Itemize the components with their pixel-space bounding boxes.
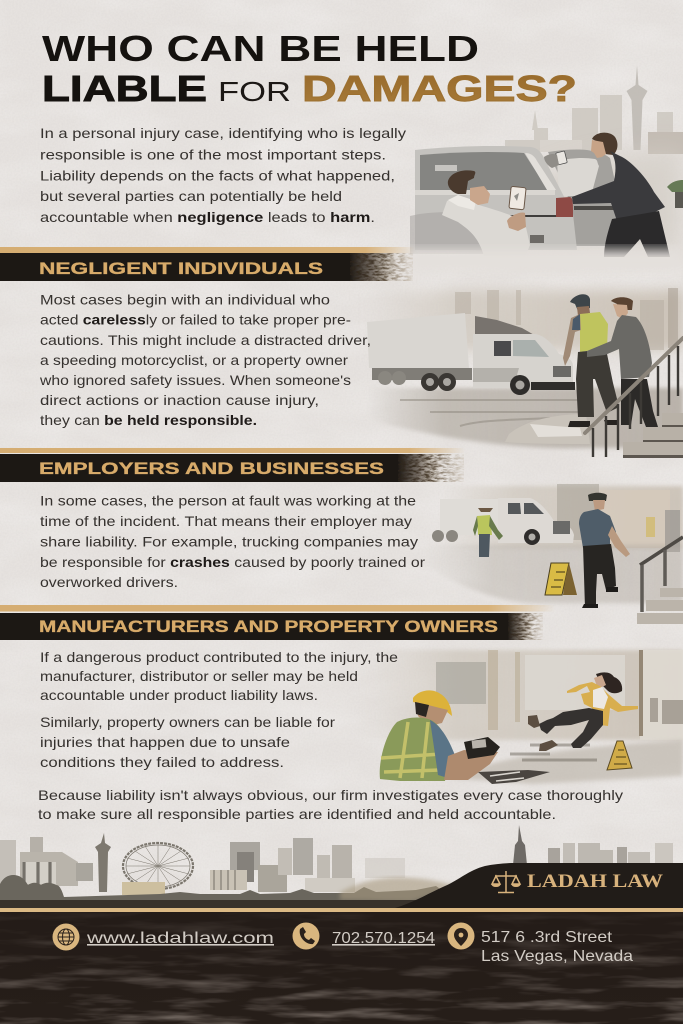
police officer bbox=[579, 493, 630, 608]
wet floor bbox=[450, 740, 683, 784]
scene: truck, worker and officer bbox=[425, 484, 683, 624]
title line 1: WHO CAN BE HELD bbox=[42, 28, 479, 69]
gold rule bbox=[0, 908, 683, 912]
closing text: to make sure all responsible parties are identified and held accountable. bbox=[38, 806, 556, 822]
manufacturers and property owners text: injuries that happen due to unsafe bbox=[40, 734, 290, 750]
website bbox=[52, 924, 274, 950]
dark hill bbox=[395, 863, 683, 908]
background buildings bbox=[365, 290, 683, 350]
employers and businesses text: In some cases, the person at fault was working at the bbox=[40, 492, 416, 508]
stratosphere tower bbox=[95, 833, 111, 892]
manufacturers and property owners text: conditions they failed to address. bbox=[40, 754, 284, 770]
manufacturers and property owners text: If a dangerous product contributed to the injury, the bbox=[40, 649, 398, 665]
manufacturers and property owners text: Similarly, property owners can be liable for bbox=[40, 714, 335, 730]
heading: EMPLOYERS AND BUSINESSES bbox=[39, 459, 384, 478]
employers and businesses text: time of the incident. That means their employer may bbox=[40, 513, 412, 529]
manufacturers and property owners text bbox=[40, 649, 398, 770]
negligent individuals text: Most cases begin with an individual who bbox=[40, 292, 330, 308]
intro text bbox=[40, 125, 406, 225]
employers and businesses text: share liability. For example, trucking companies may bbox=[40, 534, 418, 550]
slipping woman bbox=[528, 672, 638, 751]
negligent individuals text: direct actions or inaction cause injury, bbox=[40, 392, 319, 408]
plant bbox=[667, 180, 683, 208]
stairs and railing bbox=[637, 537, 683, 624]
small worker bbox=[473, 508, 503, 557]
title word LIABLE: LIABLE bbox=[42, 68, 207, 109]
intro text: accountable when negligence leads to harm . bbox=[40, 209, 375, 225]
negligent individuals text: cautions. This might include a distracted driver, bbox=[40, 332, 371, 348]
distant warm haze bbox=[340, 878, 460, 902]
heading: MANUFACTURERS AND PROPERTY OWNERS bbox=[39, 617, 498, 636]
scales icon bbox=[492, 871, 520, 892]
tree line bbox=[0, 875, 456, 900]
mist bbox=[405, 250, 683, 270]
icon: phone bbox=[292, 922, 320, 950]
address bbox=[448, 922, 633, 965]
section band: manufacturers and property owners bbox=[0, 605, 555, 640]
logo wordmark: LADAH LAW bbox=[527, 871, 663, 892]
address: Las Vegas, Nevada bbox=[481, 948, 633, 965]
ground bbox=[365, 388, 683, 448]
low building bbox=[122, 882, 165, 895]
icon: globe bbox=[52, 924, 80, 950]
dark band at base of skyline bbox=[0, 900, 683, 908]
ground bbox=[425, 545, 683, 603]
website: www.ladahlaw.com bbox=[86, 930, 274, 947]
heading: NEGLIGENT INDIVIDUALS bbox=[39, 259, 323, 278]
phone bbox=[292, 922, 435, 950]
intro text: but several parties can potentially be held bbox=[40, 188, 342, 204]
ground haze bbox=[470, 150, 683, 252]
logo bbox=[492, 871, 663, 892]
closing text: Because liability isn't always obvious, our firm investigates every case thoroughly bbox=[38, 787, 623, 803]
intro text: Liability depends on the facts of what happened, bbox=[40, 168, 395, 184]
ferris wheel bbox=[123, 843, 193, 889]
dark field bbox=[0, 912, 683, 1024]
white truck bbox=[432, 498, 574, 545]
inspector with hard hat bbox=[380, 690, 550, 784]
man in suit bbox=[587, 297, 658, 427]
scene: worker inspecting and woman slipping bbox=[360, 650, 683, 784]
address: 517 6 .3rd Street bbox=[481, 929, 613, 946]
negligent individuals text: a speeding motorcyclist, or a property owner bbox=[40, 352, 348, 368]
employers and businesses text: overworked drivers. bbox=[40, 574, 178, 590]
negligent individuals text: who ignored safety issues. When someone's bbox=[39, 372, 351, 388]
man in dark suit bbox=[544, 133, 670, 257]
negligent individuals text bbox=[39, 292, 371, 428]
storefront background bbox=[360, 650, 683, 740]
employers and businesses text: be responsible for crashes caused by poorly trained or bbox=[40, 554, 425, 570]
streak texture bbox=[0, 912, 683, 1024]
background building bbox=[440, 486, 683, 548]
stairs and railing bbox=[585, 338, 683, 458]
intro scene illustration bbox=[405, 65, 683, 270]
small wet floor sign bbox=[607, 741, 632, 770]
title word FOR: FOR bbox=[218, 76, 291, 107]
man with phone bbox=[442, 170, 530, 256]
truck bbox=[367, 313, 575, 395]
title word DAMAGES: DAMAGES? bbox=[302, 68, 577, 109]
second car door behind bbox=[548, 150, 618, 246]
manufacturers and property owners text: manufacturer, distributor or seller may be held bbox=[40, 668, 358, 684]
manufacturers and property owners text: accountable under product liability laws. bbox=[40, 687, 318, 703]
title bbox=[42, 28, 577, 109]
negligent individuals text: acted careless ly or failed to take proper pre- bbox=[40, 312, 351, 328]
intro text: responsible is one of the most important steps. bbox=[40, 146, 386, 162]
closing text bbox=[38, 787, 623, 822]
spire bbox=[513, 825, 527, 865]
footer skyline bbox=[0, 825, 683, 908]
contact row bbox=[52, 922, 633, 965]
section band: employers and businesses bbox=[0, 448, 465, 482]
icon: map pin bbox=[448, 922, 474, 950]
phone: 702.570.1254 bbox=[332, 930, 435, 947]
skyline bbox=[505, 65, 683, 154]
yellow wet floor sign bbox=[545, 563, 577, 595]
worker in vest bbox=[563, 294, 619, 427]
employers and businesses text bbox=[40, 492, 425, 590]
negligent individuals text: they can be held responsible. bbox=[40, 412, 257, 428]
intro text: In a personal injury case, identifying who is legally bbox=[40, 125, 406, 141]
footer dark panel bbox=[0, 863, 683, 1024]
car bbox=[410, 146, 577, 254]
scene: truck and pedestrians at stairs bbox=[365, 288, 683, 458]
grey buildings bbox=[0, 837, 673, 896]
section band: negligent individuals bbox=[0, 247, 415, 281]
